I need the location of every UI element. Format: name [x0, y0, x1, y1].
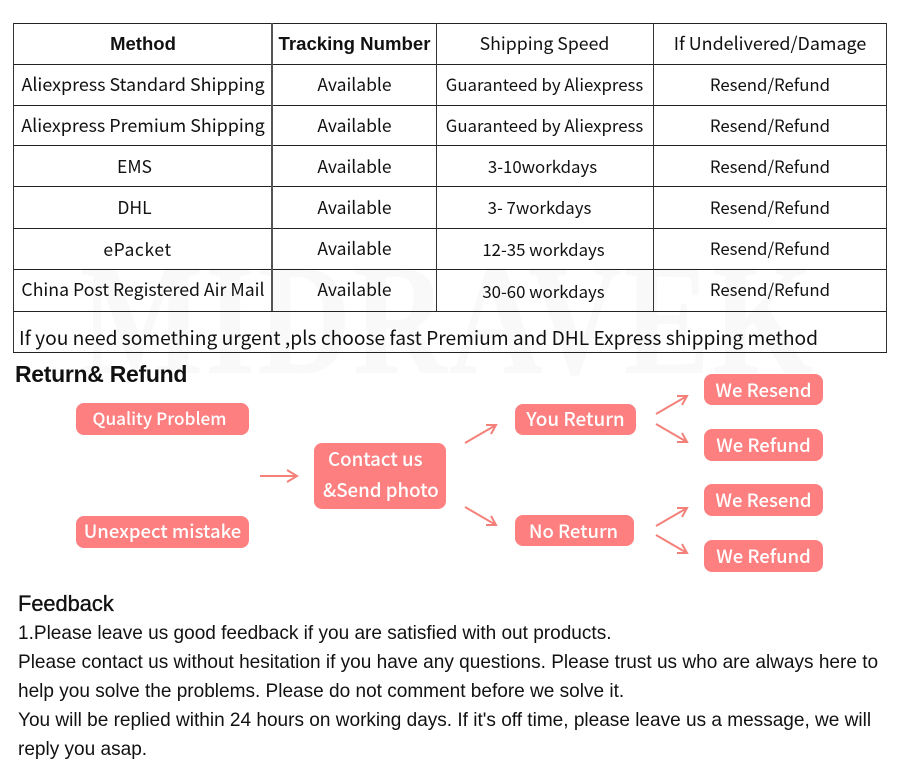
row: China Post: Resend/Refund	[710, 277, 830, 301]
row: DHL	[117, 195, 830, 220]
watermark: MIDRAVEK	[80, 230, 815, 408]
box: quality problem: Quality Problem	[92, 405, 226, 430]
row: EMS	[117, 154, 830, 179]
box: contact us: &Send photo	[323, 476, 439, 503]
arrow: to you return	[465, 425, 496, 443]
box: we resend 2: We Resend	[715, 487, 812, 513]
row: EMS: Available	[317, 154, 392, 179]
row: standard shipping: Resend/Refund	[710, 72, 830, 96]
row: standard shipping: Guaranteed by Aliexpress	[446, 72, 643, 96]
row: premium shipping: Guaranteed by Aliexpress	[446, 113, 643, 137]
row: DHL: Resend/Refund	[710, 195, 830, 219]
row: China Post	[21, 276, 830, 303]
box: unexpect mistake: Unexpect mistake	[84, 518, 241, 544]
row: premium shipping	[21, 112, 830, 138]
box: no return: No Return	[529, 518, 618, 544]
row: China Post: 30-60 workdays	[482, 279, 605, 303]
box: we refund 2: We Refund	[716, 543, 811, 569]
box: contact us: Contact us	[328, 445, 423, 472]
row: DHL: DHL	[117, 195, 152, 220]
row: standard shipping: Available	[317, 72, 392, 97]
feedback text: reply you asap.	[18, 739, 147, 760]
box: we refund 2	[704, 540, 823, 572]
box: contact us	[314, 443, 446, 509]
arrow: to no return	[465, 507, 496, 525]
arrow: to resend 2	[656, 508, 687, 526]
row: ePacket: Resend/Refund	[710, 236, 830, 260]
row: DHL: Available	[317, 195, 392, 220]
row: EMS: 3-10workdays	[488, 154, 597, 178]
row: DHL: 3- 7workdays	[488, 195, 591, 219]
feedback text	[18, 623, 878, 760]
table header: undelivered: If Undelivered/Damage	[674, 30, 866, 56]
row: standard shipping	[21, 71, 830, 97]
row: ePacket	[103, 236, 830, 262]
heading: feedback: Feedback	[18, 591, 114, 616]
row: premium shipping: Resend/Refund	[710, 113, 830, 137]
arrow: to refund 1	[656, 424, 687, 442]
feedback text: help you solve the problems. Please do not comment before we solve it.	[18, 681, 624, 702]
box: we refund 1	[704, 429, 823, 461]
table header: speed: Shipping Speed	[480, 30, 609, 56]
table header: method: Method	[110, 33, 176, 54]
table note: If you need something urgent ,pls choose fast Premium and DHL Express shipping method	[19, 323, 818, 351]
feedback text: You will be replied within 24 hours on working days. If it's off time, please leave us a message, we will	[18, 710, 871, 731]
row: China Post: Available	[317, 277, 392, 302]
feedback text: 1.Please leave us good feedback if you are satisfied with out products.	[18, 623, 612, 644]
feedback text: Please contact us without hesitation if you have any questions. Please trust us who are always here to	[18, 652, 878, 673]
box: we resend 2	[704, 484, 823, 516]
row: ePacket: ePacket	[103, 237, 172, 262]
arrow: to resend 1	[656, 396, 687, 414]
box: we refund 1: We Refund	[716, 432, 811, 458]
arrow: to contact	[260, 470, 297, 482]
row: EMS: Resend/Refund	[710, 154, 830, 178]
row: ePacket: Available	[317, 236, 392, 261]
row: premium shipping: Available	[317, 113, 392, 138]
row: EMS: EMS	[117, 154, 152, 179]
box: no return	[515, 515, 634, 546]
row: standard shipping: Aliexpress Standard Shipping	[21, 71, 265, 97]
row: China Post: China Post Registered Air Mail	[21, 276, 265, 302]
box: we resend 1: We Resend	[715, 377, 812, 403]
arrow: to refund 2	[656, 535, 687, 553]
box: we resend 1	[704, 374, 823, 405]
table header: tracking: Tracking Number	[279, 33, 430, 54]
row: premium shipping: Aliexpress Premium Shipping	[21, 112, 265, 138]
box: you return: You Return	[526, 405, 625, 432]
box: quality problem	[76, 403, 249, 435]
heading: return and refund: Return& Refund	[15, 361, 187, 387]
shipping table	[13, 23, 887, 353]
row: ePacket: 12-35 workdays	[482, 237, 605, 261]
